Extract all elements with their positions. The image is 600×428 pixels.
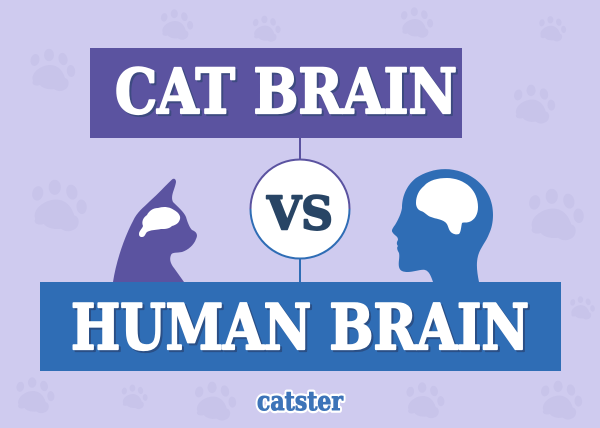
heading shadow: cat brain: CAT BRAIN — [117, 57, 459, 130]
icon: cat brain — [139, 207, 180, 237]
panel: human brain title — [40, 282, 561, 371]
heading: cat brain: CAT BRAIN — [115, 55, 457, 128]
icon: human head silhouette with brain — [392, 169, 493, 282]
logo: catster: catster — [257, 387, 343, 417]
logo: catster: catster — [257, 387, 343, 417]
connector line: bottom — [299, 257, 301, 283]
panel: cat brain title — [90, 48, 462, 138]
vs text: VS — [266, 186, 333, 240]
icon: cat silhouette with brain — [113, 179, 197, 282]
connector line: top — [299, 138, 301, 162]
vs badge — [250, 160, 350, 258]
icon: human brain — [416, 178, 478, 234]
